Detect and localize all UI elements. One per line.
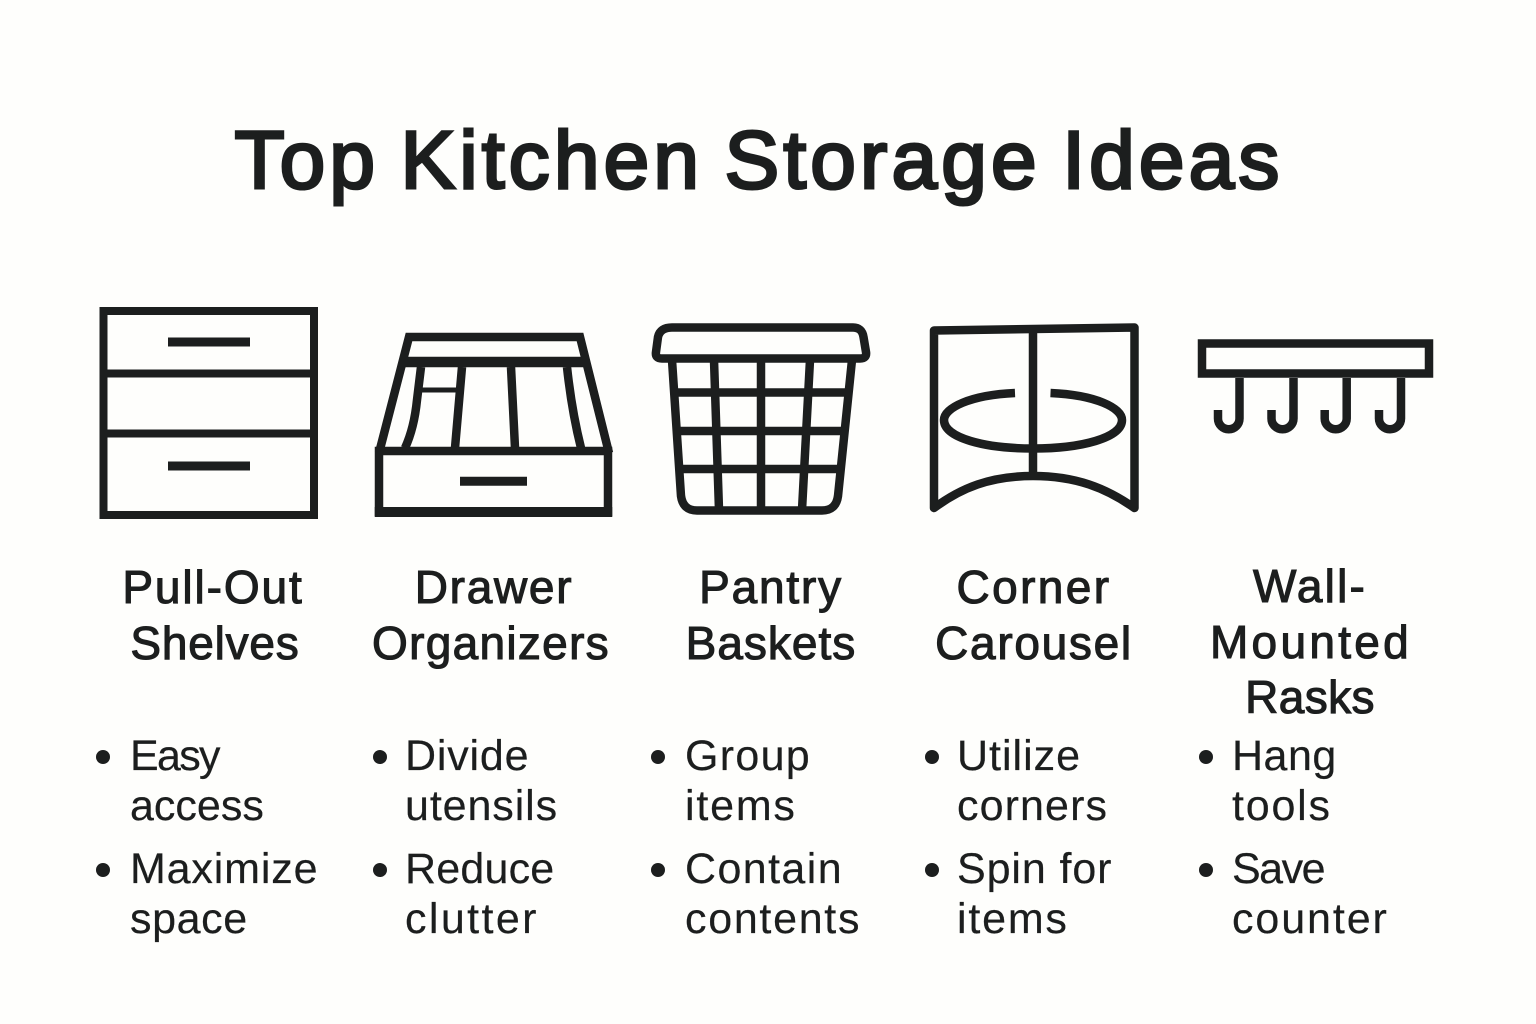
list: wall-mounted racks: tools: [1232, 782, 1332, 830]
list: pantry baskets: Group: [685, 732, 811, 780]
icon: drawer organizers: [375, 337, 612, 512]
heading: pull-out shelves: [122, 561, 304, 668]
list: corner carousel: items: [957, 895, 1069, 943]
icon: pantry basket: [656, 328, 866, 510]
heading: drawer organizers: [372, 561, 610, 669]
heading: wall-mounted racks: Wall-: [1253, 560, 1367, 612]
list: corner carousel: [925, 732, 1112, 943]
list: drawer organizers: Divide: [405, 732, 529, 780]
icon: corner carousel: [934, 328, 1134, 508]
heading: corner carousel: Carousel: [935, 616, 1133, 668]
list: wall-mounted racks: Save: [1232, 845, 1324, 893]
list: corner carousel: Utilize: [957, 732, 1081, 780]
heading: pull-out shelves: Pull-Out: [122, 561, 304, 613]
list: drawer organizers: [373, 732, 558, 943]
heading: pantry baskets: Pantry: [699, 561, 843, 613]
list: corner carousel: corners: [957, 782, 1108, 830]
list: wall-mounted racks: counter: [1232, 895, 1389, 943]
list: pull-out shelves: [96, 732, 318, 943]
list: pantry baskets: contents: [685, 895, 861, 943]
heading: corner carousel: [935, 561, 1133, 668]
heading: pantry baskets: [686, 561, 856, 668]
heading: wall-mounted racks: [1210, 560, 1412, 723]
list: wall-mounted racks: [1199, 732, 1389, 943]
icon row: [100, 307, 1434, 519]
heading: wall-mounted racks: Mounted: [1210, 616, 1412, 668]
list: drawer organizers: utensils: [405, 782, 558, 830]
list: wall-mounted racks: Hang: [1232, 732, 1337, 780]
list: pantry baskets: items: [685, 782, 797, 830]
heading: drawer organizers: Drawer: [415, 561, 573, 613]
list: pantry baskets: Contain: [685, 845, 843, 893]
list: pull-out shelves: Easy: [130, 732, 219, 780]
list: pantry baskets: [651, 732, 861, 943]
heading: wall-mounted racks: Rasks: [1245, 671, 1375, 723]
heading: corner carousel: Corner: [956, 561, 1112, 613]
heading: pull-out shelves: Shelves: [130, 616, 300, 668]
list: corner carousel: Spin for: [957, 845, 1112, 893]
list: pull-out shelves: space: [130, 895, 248, 943]
icon: pull-out shelves: [103, 311, 314, 515]
heading: drawer organizers: Organizers: [372, 616, 610, 668]
icon: wall-mounted racks: [1202, 344, 1429, 429]
list: pull-out shelves: Maximize: [130, 845, 318, 893]
title: Top Kitchen Storage Ideas: [234, 115, 1284, 206]
list: drawer organizers: clutter: [405, 895, 539, 943]
list: drawer organizers: Reduce: [405, 845, 554, 893]
heading: pantry baskets: Baskets: [686, 616, 856, 668]
list: pull-out shelves: access: [130, 782, 264, 830]
